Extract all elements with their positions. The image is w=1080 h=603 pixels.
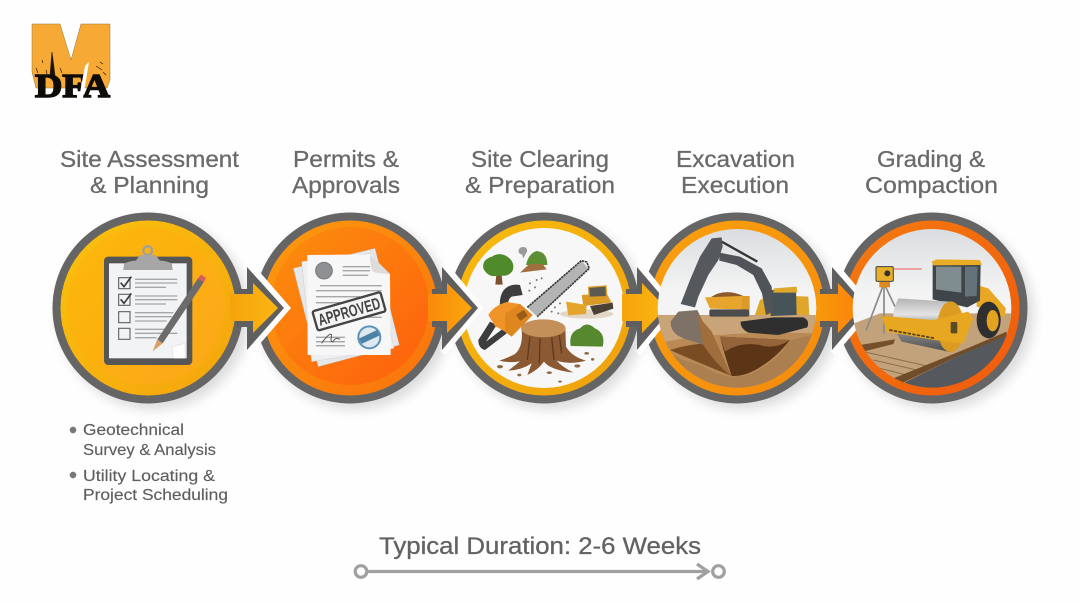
blue stamp band [359,330,380,344]
pit wall [720,337,790,352]
pencil [153,275,206,351]
icon: approved documents [293,248,399,367]
orange arrow [428,283,472,333]
seal [316,262,332,279]
checklist lines [135,279,177,338]
cab window highlight [936,267,961,293]
stump trunk and roots [499,328,586,375]
duration timeline [355,533,724,579]
logo letter M [32,24,110,88]
front sheet [307,254,391,355]
bullet dot [70,472,76,478]
arrow: step 2 to 3 [428,263,480,353]
chainsaw body [478,285,533,350]
bar blade [527,261,589,317]
chainsaw bar [527,261,589,317]
laser beam [893,267,922,271]
soil front [674,335,812,388]
illustration: site clearing [478,247,613,383]
trunk grain [527,335,562,363]
cab roof [773,287,797,293]
check marks [121,277,131,303]
cab [932,259,982,307]
panel: step 1 circle [52,212,244,404]
laser level [866,267,922,333]
bullet list [70,422,228,504]
yellow arrow [622,283,666,333]
title: planning: & Planning [90,172,209,198]
sawdust [528,277,561,314]
wood chips [497,352,594,383]
arrow: step 4 to 5 [815,263,871,353]
ground [653,315,820,392]
frame window [951,322,957,333]
truck cab [742,296,750,310]
ground [850,313,1017,390]
arm [681,237,723,307]
stripe [889,330,935,338]
tracks [590,303,613,315]
step titles [60,146,998,198]
tracks [741,317,808,335]
ring [642,212,832,404]
body yellow [755,295,809,315]
logo [32,24,110,105]
pit left [670,343,732,376]
cab roof [932,259,982,265]
clip ring [143,246,152,255]
stamp frame [312,292,386,331]
housing shade [505,304,533,337]
arrow: step 1 to 2 [230,263,287,353]
yellow disc [60,220,236,396]
tripod head [879,282,890,287]
orange band [650,220,824,396]
drum cylinder [893,298,957,352]
bullet dot [70,427,76,433]
blue stamp [358,326,380,348]
tripod [866,283,895,333]
page curl [172,343,185,358]
title: approvals: Approvals [292,172,400,198]
shrub [570,324,603,347]
housing detail [516,310,528,321]
white gap [833,263,871,353]
title: excavation: Excavation [676,146,795,172]
start node [355,566,367,577]
title: preparation: & Preparation [465,172,615,198]
panel: step 4 circle [642,212,832,404]
pencil eraser [198,275,206,282]
frame [882,312,973,343]
inner disc [271,227,429,385]
sky [850,227,1017,323]
ground [560,309,613,319]
cab frame [933,263,981,307]
back sheet [293,248,399,367]
cab [771,288,797,316]
canopy [483,254,513,276]
title: execution: Execution [681,172,789,198]
engine hood [977,285,1006,318]
title: permits: Permits & [293,146,399,172]
white gap [248,263,287,353]
spoil rim [665,332,812,388]
timeline line [367,564,708,579]
pencil barrel [157,278,204,343]
blade [566,302,587,315]
ring [836,212,1028,404]
bullet text: Survey & Analysis [83,442,216,459]
logo crack [79,62,89,98]
drum end [937,301,964,352]
title: site clearing: Site Clearing [471,146,609,172]
stump top [521,319,566,337]
smoke [519,247,527,258]
yellow arrow [230,283,278,333]
truck chassis [709,309,749,317]
panel: step 5 circle [836,212,1028,404]
orange arrow [815,283,862,333]
cab [589,286,607,297]
logo grunge marks [36,52,106,78]
clip body [123,255,173,270]
illustration: excavator [653,227,820,392]
end node [713,566,724,577]
lower handle [478,322,507,350]
ring [254,212,446,404]
gravel strip bottom [893,332,1007,383]
illustration: roller compactor [850,227,1017,390]
level lens [884,270,890,276]
paper [109,263,187,358]
icon: clipboard checklist [104,246,206,365]
logo letters DFA: DFA [35,68,110,105]
stump [499,319,586,375]
body [582,293,612,306]
truck load [711,292,745,297]
boom [719,253,773,315]
debris pile [519,247,547,273]
housing [488,302,533,337]
rear hub [987,310,999,331]
white disc [464,228,624,388]
gray arrowhead [236,267,284,350]
pit main [720,337,790,376]
bulldozer [560,286,613,319]
bar chain [527,261,589,317]
ring [448,212,640,404]
dump truck [705,292,750,317]
clipboard board [104,257,192,365]
plank lines [863,352,930,375]
gray arrowhead [432,267,478,350]
pencil tip [153,339,163,351]
level head [876,267,893,281]
gravel strip top [860,339,895,352]
trunk [495,275,503,285]
document lines [316,267,382,346]
panel: step 2 circle [254,212,446,404]
clip [123,246,173,270]
bush [526,251,547,265]
gray arrowhead [626,267,672,350]
bucket [671,310,715,348]
page fold [370,254,390,274]
stamp label: APPROVED [316,294,383,330]
bullet text: Geotechnical [83,422,184,439]
top handle [500,284,523,305]
asphalt [902,335,1017,390]
excavator [671,237,809,377]
ring [52,212,244,404]
inner disc [67,227,225,385]
panel: step 3 circle [448,212,640,404]
drum [893,298,964,352]
title: site assessment: Site Assessment [60,146,240,172]
signature [322,334,340,343]
arrow: step 3 to 4 [622,263,674,353]
white gap [443,263,480,353]
orange-red band [844,220,1020,396]
duration label: Typical Duration: 2-6 Weeks [379,533,701,560]
logs [520,264,547,273]
orange disc [262,220,438,396]
gold band [456,220,632,396]
title: grading: Grading & [877,146,985,172]
cab door window [965,267,978,297]
hydraulic cylinder [722,242,757,262]
tree [483,254,513,285]
checkboxes [119,278,130,339]
roller rear tire [977,302,1001,338]
bucket soil [697,315,732,377]
truck bed [705,296,743,309]
white gap [638,263,674,353]
sky [653,227,820,320]
title: compaction: Compaction [865,172,998,198]
middle sheet [302,253,394,362]
bullet text: Project Scheduling [83,487,228,504]
bullet text: Utility Locating & [83,468,215,485]
gray arrowhead [820,267,868,350]
